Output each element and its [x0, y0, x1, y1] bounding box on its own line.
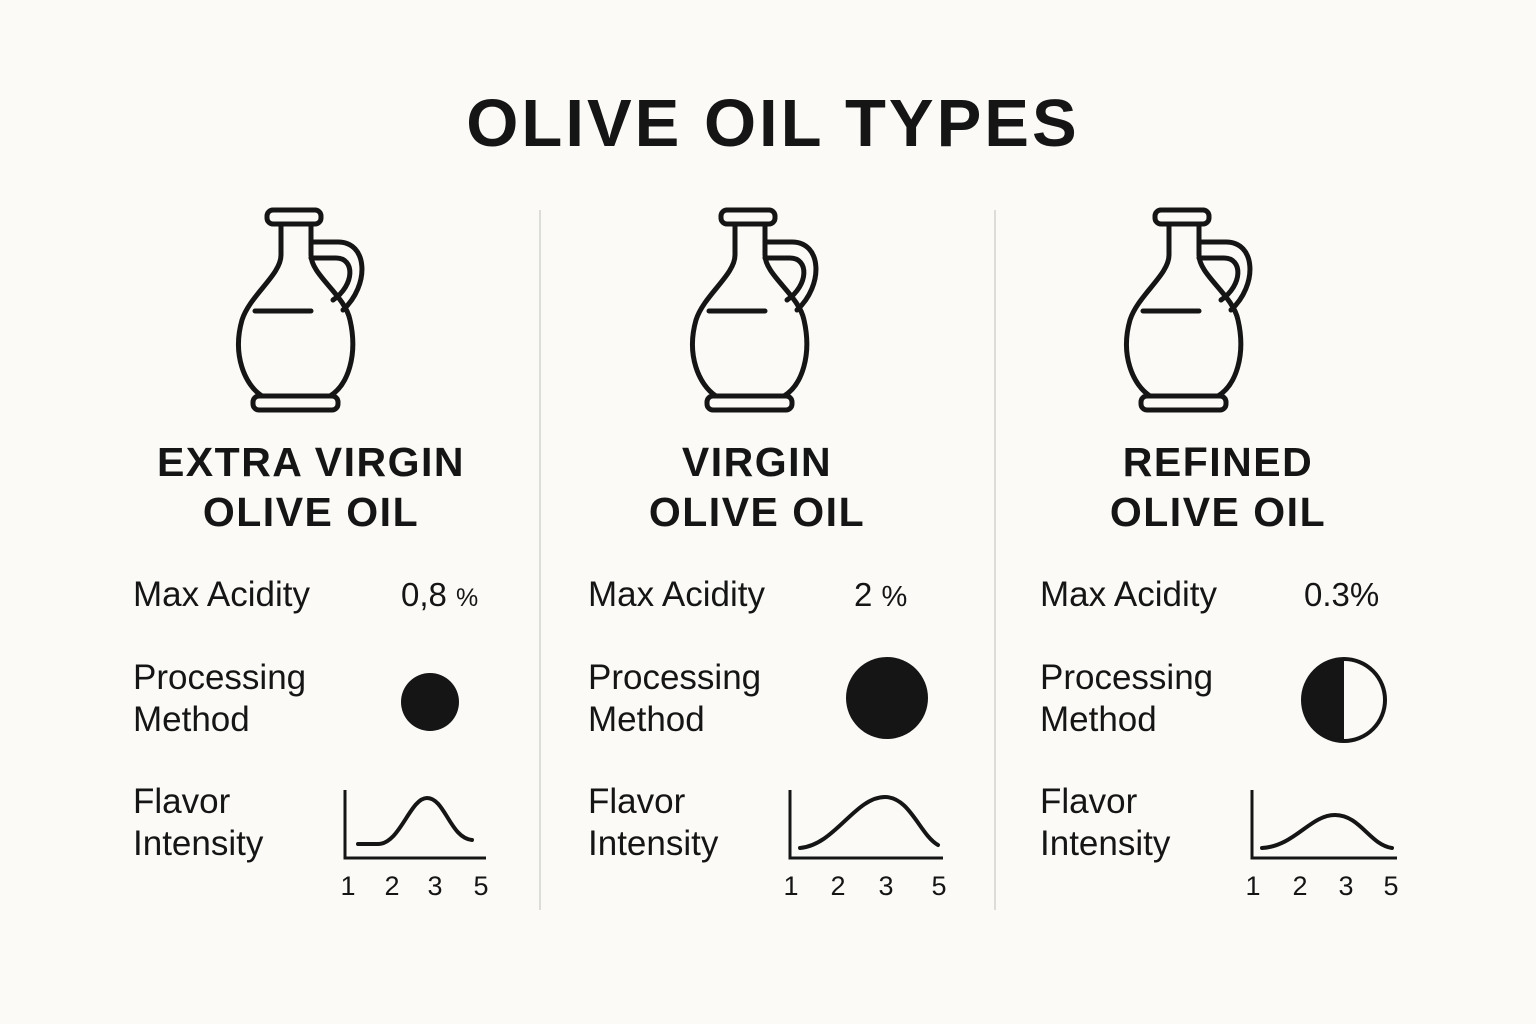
- heading: OLIVE OIL: [649, 489, 865, 535]
- processing method: Method: [133, 700, 250, 739]
- heading: OLIVE OIL: [203, 489, 419, 535]
- flavor intensity chart: [1040, 782, 1399, 901]
- max acidity: [1040, 575, 1379, 614]
- max acidity: Max Acidity: [1040, 575, 1217, 614]
- heading: REFINED: [1123, 439, 1313, 485]
- max acidity: 0,8 %: [401, 576, 478, 613]
- flavor intensity chart: 1: [340, 871, 356, 901]
- processing method: Processing: [588, 658, 761, 697]
- processing method: [1040, 658, 1385, 742]
- panel: virgin: [588, 210, 947, 901]
- icon: jug 1: [239, 210, 362, 410]
- flavor intensity chart: Flavor: [588, 782, 686, 821]
- processing method: [133, 658, 459, 739]
- flavor intensity chart: 2: [830, 871, 846, 901]
- flavor intensity chart: 3: [878, 871, 894, 901]
- flavor intensity chart: Flavor: [133, 782, 231, 821]
- panel: refined: [1040, 210, 1399, 901]
- processing method: Processing: [133, 658, 306, 697]
- max acidity: Max Acidity: [133, 575, 310, 614]
- flavor intensity chart: Intensity: [588, 824, 719, 863]
- heading: VIRGIN: [682, 439, 832, 485]
- max acidity: Max Acidity: [588, 575, 765, 614]
- processing method: Processing: [1040, 658, 1213, 697]
- flavor intensity chart: 2: [384, 871, 400, 901]
- processing method: [588, 657, 928, 739]
- flavor intensity chart: 5: [931, 871, 947, 901]
- max acidity: 0.3%: [1304, 576, 1379, 613]
- heading: OLIVE OIL: [1110, 489, 1326, 535]
- max acidity: [588, 575, 907, 614]
- flavor intensity chart: 1: [783, 871, 799, 901]
- title: OLIVE OIL TYPES: [466, 86, 1080, 161]
- max acidity: 2 %: [854, 576, 907, 613]
- flavor intensity chart: 3: [1338, 871, 1354, 901]
- flavor intensity chart: 3: [427, 871, 443, 901]
- flavor intensity chart: 5: [1383, 871, 1399, 901]
- flavor intensity chart: 2: [1292, 871, 1308, 901]
- flavor intensity chart: 5: [473, 871, 489, 901]
- panel: extra virgin: [133, 210, 489, 901]
- flavor intensity chart: Flavor: [1040, 782, 1138, 821]
- icon: jug 3: [1127, 210, 1250, 410]
- processing method: Method: [588, 700, 705, 739]
- max acidity: [133, 575, 478, 614]
- processing method: Method: [1040, 700, 1157, 739]
- flavor intensity chart: Intensity: [1040, 824, 1171, 863]
- flavor intensity chart: [588, 782, 947, 901]
- flavor intensity chart: Intensity: [133, 824, 264, 863]
- heading: EXTRA VIRGIN: [157, 439, 465, 485]
- icon: jug 2: [693, 210, 816, 410]
- flavor intensity chart: [133, 782, 489, 901]
- flavor intensity chart: 1: [1245, 871, 1261, 901]
